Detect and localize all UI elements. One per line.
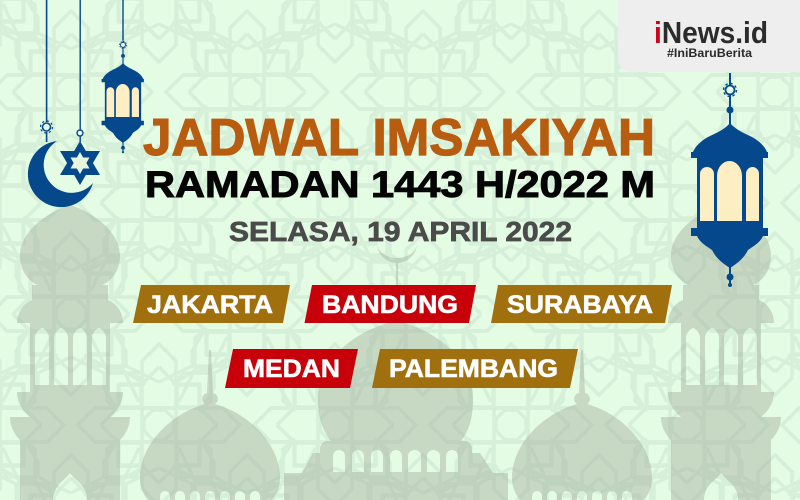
right small dome	[512, 350, 652, 500]
city tag: Palembang	[372, 349, 578, 388]
mosque silhouette	[10, 205, 781, 500]
logo tagline: #IniBaruBerita	[667, 48, 753, 60]
right minaret	[661, 205, 781, 500]
city tag: Bandung: BANDUNG	[322, 291, 458, 319]
logo panel: iNews.id	[618, 0, 800, 72]
small hanging lantern	[102, 0, 144, 153]
title: JADWAL IMSAKIYAH	[143, 109, 655, 167]
hanging crescent moon	[28, 0, 93, 207]
city tag: Palembang: PALEMBANG	[389, 355, 558, 383]
city tag: Medan: MEDAN	[243, 355, 340, 383]
hanging star	[60, 0, 100, 185]
city tag: Medan	[225, 349, 358, 388]
left small dome	[140, 350, 280, 500]
date: SELASA, 19 APRIL 2022	[229, 216, 572, 247]
city tag: Jakarta	[133, 285, 290, 323]
subtitle: RAMADAN 1443 H/2022 M	[145, 164, 655, 205]
city tag: Bandung	[304, 285, 476, 323]
city tag: Surabaya: SURABAYA	[507, 291, 653, 319]
logo wordmark: iNews.id	[654, 15, 768, 50]
central dome	[284, 243, 508, 500]
city tag: Surabaya	[491, 285, 672, 323]
left minaret	[10, 205, 130, 500]
large hanging lantern	[691, 73, 768, 287]
city tag: Jakarta: JAKARTA	[147, 291, 273, 319]
